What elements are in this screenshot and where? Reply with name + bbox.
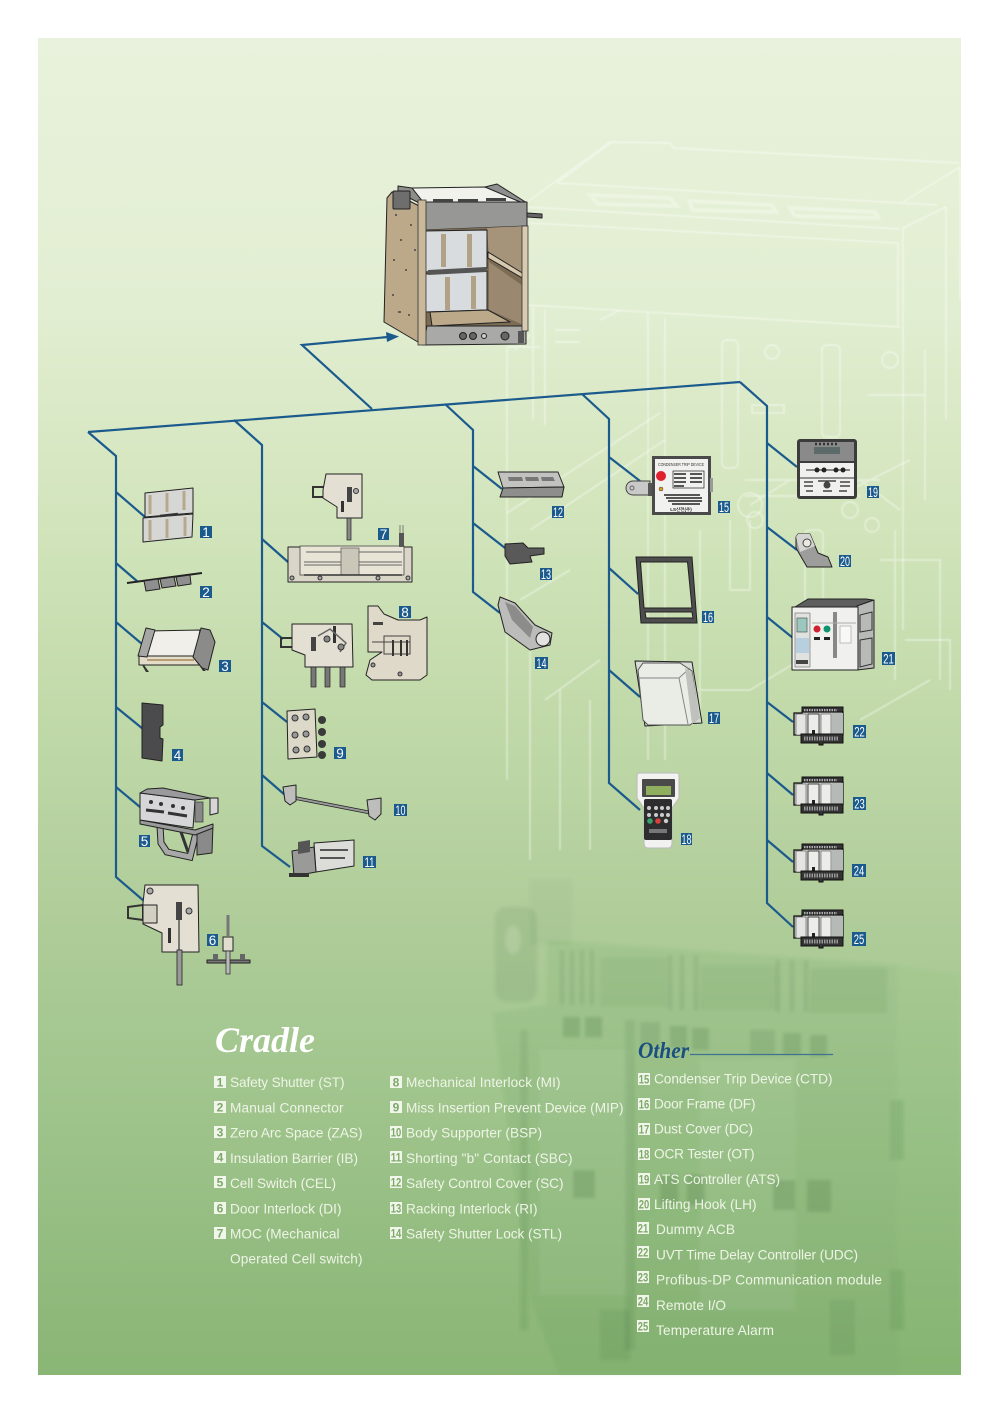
part 24: remote I/O bbox=[794, 844, 843, 882]
part 7: MOC mechanical operated cell switch bbox=[288, 474, 412, 582]
legend item 12: Safety Control Cover (SC) bbox=[406, 1176, 564, 1191]
label 2: 2 bbox=[202, 585, 210, 600]
part 13: racking interlock bbox=[505, 543, 544, 564]
legend item 25: 25 bbox=[638, 1319, 648, 1333]
legend item 12: 12 bbox=[391, 1175, 401, 1189]
legend item 14: Safety Shutter Lock (STL) bbox=[406, 1226, 562, 1242]
legend item 5: Cell Switch (CEL) bbox=[230, 1176, 336, 1191]
legend item 4: Insulation Barrier (IB) bbox=[230, 1151, 358, 1166]
legend item 13: 13 bbox=[391, 1201, 401, 1215]
label 16: 16 bbox=[703, 610, 713, 625]
label 9 bbox=[334, 746, 346, 761]
legend item 4: 4 bbox=[217, 1150, 224, 1164]
label 18: 18 bbox=[682, 832, 692, 847]
part 5: cell switch bbox=[140, 788, 218, 857]
part 15: condenser trip device bbox=[626, 458, 713, 514]
legend item 16: 16 bbox=[639, 1097, 649, 1111]
heading rule bbox=[690, 1054, 833, 1056]
label 25: 25 bbox=[854, 932, 864, 947]
legend item 9: Miss Insertion Prevent Device (MIP) bbox=[406, 1100, 624, 1116]
part 14: safety shutter lock bbox=[498, 597, 552, 650]
label 4: 4 bbox=[174, 748, 182, 763]
label 18 bbox=[681, 832, 692, 847]
legend item 23: Profibus-DP Communication module bbox=[656, 1272, 882, 1288]
label 6 bbox=[207, 933, 218, 948]
part 8: mechanical interlock plate bbox=[366, 606, 427, 680]
legend item 6: 6 bbox=[217, 1201, 224, 1215]
label 15: 15 bbox=[719, 500, 729, 515]
heading: Other: Other bbox=[638, 1038, 690, 1063]
legend item 13: Racking Interlock (RI) bbox=[406, 1201, 538, 1216]
panel: other legend bbox=[637, 1038, 882, 1338]
legend item 6: Door Interlock (DI) bbox=[230, 1201, 342, 1216]
legend item 21: Dummy ACB bbox=[656, 1222, 735, 1237]
label 10 bbox=[394, 803, 407, 818]
label 20: 20 bbox=[840, 554, 850, 569]
legend item 7: Operated Cell switch) bbox=[230, 1252, 362, 1267]
label 14: 14 bbox=[536, 656, 547, 671]
label 22: 22 bbox=[854, 724, 865, 740]
label 19: 19 bbox=[868, 485, 878, 500]
connector column: parts 19 to 25 bbox=[740, 382, 797, 927]
part: mechanical interlock assembly bbox=[281, 624, 353, 687]
legend item 25 bbox=[637, 1319, 774, 1338]
label 9: 9 bbox=[336, 746, 344, 761]
legend item 1: 1 bbox=[217, 1075, 224, 1089]
part 2: manual connector bbox=[127, 573, 202, 591]
legend item 16: Door Frame (DF) bbox=[654, 1096, 756, 1112]
part 17: dust cover bbox=[635, 661, 702, 726]
label 4 bbox=[172, 748, 183, 763]
heading: Cradle: Cradle bbox=[215, 1020, 315, 1060]
label 16 bbox=[702, 610, 714, 625]
arrow: connector into main cradle bbox=[302, 332, 399, 409]
connector column: parts 1 to 6 bbox=[88, 432, 145, 901]
legend item 24: 24 bbox=[638, 1294, 648, 1308]
label 1 bbox=[200, 525, 212, 540]
legend item 11: 11 bbox=[391, 1150, 402, 1164]
legend item 2: Manual Connector bbox=[230, 1100, 344, 1116]
label 10: 10 bbox=[396, 803, 406, 818]
label 7 bbox=[378, 527, 389, 542]
part 4: insulation barrier bbox=[142, 703, 163, 761]
part 11: shorting b contact bbox=[289, 840, 354, 877]
legend item 8: 8 bbox=[393, 1075, 400, 1089]
label 13: 13 bbox=[541, 567, 551, 582]
legend item 5: 5 bbox=[217, 1175, 224, 1189]
legend item 1: Safety Shutter (ST) bbox=[230, 1075, 344, 1090]
part 12: safety control cover bbox=[498, 472, 564, 497]
label 17: 17 bbox=[709, 711, 719, 726]
part 15: condenser trip device: CONDENSER TRIP DEVICE bbox=[658, 462, 704, 467]
legend item 8: Mechanical Interlock (MI) bbox=[406, 1075, 560, 1090]
part 16: door frame bbox=[636, 557, 697, 623]
label 7: 7 bbox=[380, 527, 387, 542]
connector column: parts 7 to 11 bbox=[234, 420, 290, 867]
legend item 7: 7 bbox=[217, 1226, 224, 1240]
label 12 bbox=[552, 505, 564, 520]
label 17 bbox=[708, 711, 720, 726]
legend item 20: 20 bbox=[639, 1197, 649, 1211]
part 18: OCR tester bbox=[637, 773, 679, 848]
label 1: 1 bbox=[202, 525, 210, 540]
part 23: Profibus-DP communication module bbox=[794, 777, 843, 815]
part 3: zero arc space bbox=[138, 628, 215, 672]
legend item 11: Shorting "b" Contact (SBC) bbox=[406, 1151, 572, 1166]
legend item 15: 15 bbox=[639, 1072, 649, 1086]
part 9: miss insertion prevent device bbox=[287, 709, 326, 759]
legend item 3: 3 bbox=[217, 1125, 224, 1139]
label 12: 12 bbox=[553, 505, 563, 520]
connector trunk line bbox=[88, 382, 740, 432]
part 20: lifting hook bbox=[796, 534, 832, 567]
legend item 3: Zero Arc Space (ZAS) bbox=[230, 1126, 362, 1141]
legend item 18: 18 bbox=[639, 1147, 649, 1161]
legend item 17: Dust Cover (DC) bbox=[654, 1122, 753, 1136]
label 5 bbox=[139, 834, 150, 849]
legend item 2: 2 bbox=[217, 1100, 224, 1114]
label 19 bbox=[867, 485, 879, 500]
connector column: parts 12 to 14 bbox=[445, 404, 505, 613]
label 11: 11 bbox=[364, 855, 374, 870]
legend item 25: Temperature Alarm bbox=[656, 1323, 774, 1338]
label 23: 23 bbox=[854, 796, 865, 812]
label 20 bbox=[839, 554, 851, 569]
legend item 17: 17 bbox=[639, 1122, 649, 1136]
label 6: 6 bbox=[209, 933, 216, 948]
label 3: 3 bbox=[221, 659, 229, 674]
legend item 7 bbox=[214, 1226, 362, 1267]
legend item 15: Condenser Trip Device (CTD) bbox=[654, 1072, 832, 1086]
ghost line art: cradle outline behind upper right bbox=[507, 142, 960, 860]
legend item 24: Remote I/O bbox=[656, 1298, 726, 1313]
label 21: 21 bbox=[883, 652, 894, 666]
legend item 24 bbox=[637, 1294, 726, 1313]
legend item 7: MOC (Mechanical bbox=[230, 1226, 340, 1242]
main cradle illustration bbox=[384, 184, 542, 345]
part 1: safety shutter bbox=[143, 488, 193, 542]
legend item 22: UVT Time Delay Controller (UDC) bbox=[656, 1248, 858, 1262]
legend item 22: 22 bbox=[638, 1245, 648, 1259]
connector column: parts 15 to 18 bbox=[582, 394, 640, 810]
legend item 9: 9 bbox=[393, 1100, 400, 1114]
legend item 18: OCR Tester (OT) bbox=[654, 1147, 754, 1162]
legend item 14: 14 bbox=[391, 1226, 401, 1240]
legend item 23: 23 bbox=[638, 1270, 648, 1284]
part 6: door interlock bbox=[128, 885, 250, 985]
legend item 19: 19 bbox=[639, 1172, 649, 1186]
legend item 10: 10 bbox=[391, 1125, 401, 1139]
label 13 bbox=[540, 567, 552, 582]
label 5: 5 bbox=[141, 834, 148, 849]
legend item 21: 21 bbox=[638, 1221, 648, 1235]
label 8 bbox=[399, 605, 411, 620]
label 2 bbox=[200, 585, 212, 600]
label 3 bbox=[219, 659, 231, 674]
label 15 bbox=[718, 500, 730, 515]
part 22: UVT time delay controller bbox=[794, 707, 843, 745]
legend item 10: Body Supporter (BSP) bbox=[406, 1126, 542, 1141]
legend item 20: Lifting Hook (LH) bbox=[654, 1197, 756, 1212]
part 10: body supporter bbox=[283, 785, 381, 820]
part 21: dummy ACB bbox=[792, 599, 874, 670]
part 19: ATS controller bbox=[797, 439, 857, 499]
label 14 bbox=[535, 656, 548, 671]
legend item 19: ATS Controller (ATS) bbox=[654, 1172, 780, 1187]
panel: cradle legend bbox=[214, 1020, 624, 1267]
part 15: condenser trip device: LS산전(주) bbox=[670, 507, 692, 512]
ghost image: dark machine silhouette behind lower right bbox=[493, 880, 960, 1375]
label 24: 24 bbox=[854, 864, 865, 878]
part 25: temperature alarm bbox=[794, 910, 843, 948]
label 8: 8 bbox=[401, 605, 409, 620]
